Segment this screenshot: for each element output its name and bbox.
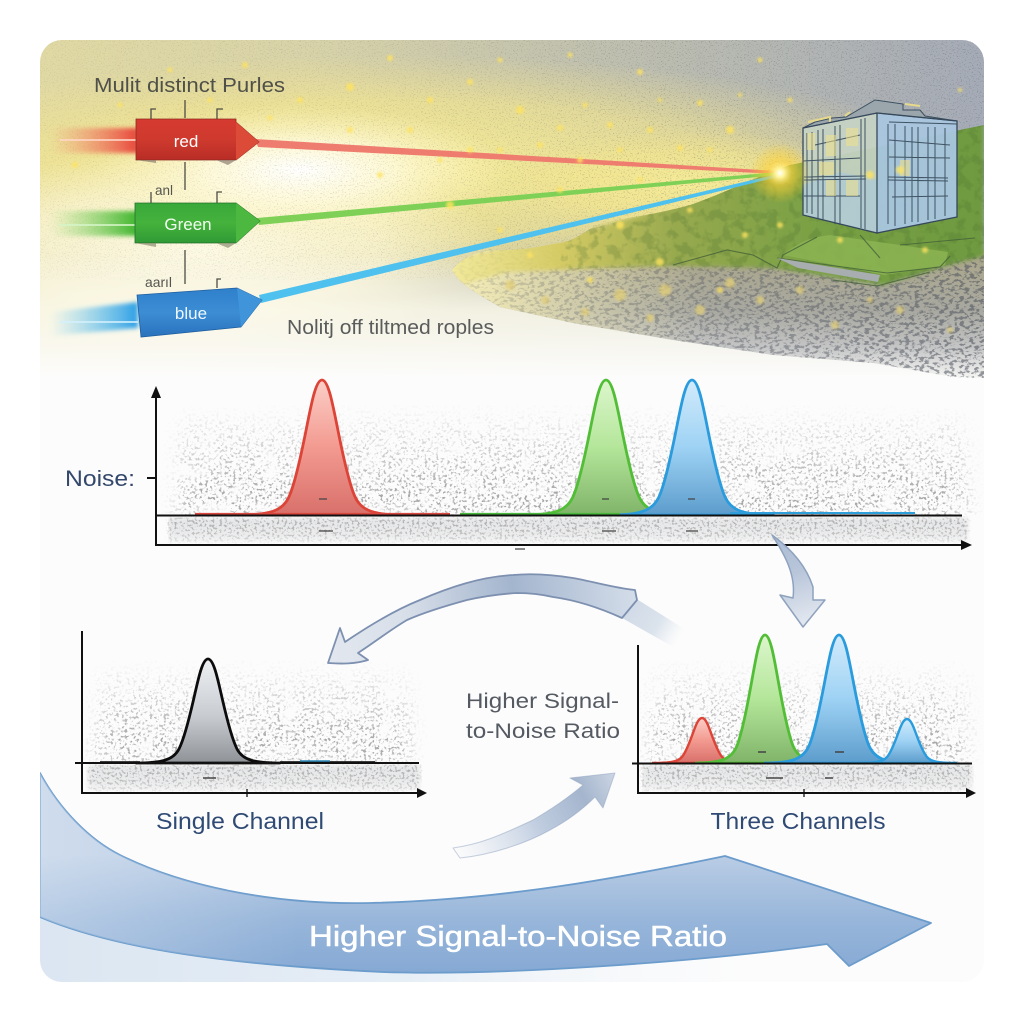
peak: tall blue [764, 635, 914, 763]
connectors [151, 100, 223, 288]
caption: noise ripples: Nolitj off tiltmed roples [287, 317, 494, 339]
arrow: down to three channels [772, 535, 825, 627]
panel: light beams hitting a building [0, 40, 984, 385]
yellow blotches on gravel [505, 278, 953, 333]
light focus point [752, 145, 808, 201]
axes [75, 631, 420, 797]
arrow: green pulse: Green [164, 215, 212, 234]
beam: blue [259, 174, 778, 303]
landscape: mottled vegetation [560, 120, 984, 290]
callout: higher signal-to-noise ratio [466, 692, 619, 738]
peak: blue [610, 380, 774, 515]
landscape [445, 120, 984, 380]
callout: higher signal-to-noise ratio: to-Noise Ratio [466, 720, 620, 743]
label: noise: Noise: [65, 466, 135, 491]
peak: black [136, 659, 280, 763]
landscape: lighter field patches [783, 235, 948, 275]
arrow: single channel up to three channels [453, 773, 615, 858]
sparkle dots [72, 52, 962, 293]
noise field [167, 415, 978, 515]
arrow: red pulse [50, 119, 259, 165]
axes [632, 645, 972, 797]
landscape: road [777, 258, 880, 282]
icon: building [803, 100, 957, 233]
landscape: gravel foreground [452, 250, 984, 380]
connector label: and: aarıl [145, 274, 172, 290]
arrow: red pulse: red [174, 132, 198, 151]
label: three channels: Three Channels [710, 808, 886, 834]
heading: distinct pulses: Mulit distinct Purles [94, 75, 285, 97]
arrow: blue pulse [50, 288, 262, 337]
callout: higher signal-to-noise ratio: Higher Signal- [466, 690, 619, 713]
peak: small blue [857, 719, 957, 763]
arrow: green pulse [50, 203, 260, 248]
peak: green [540, 378, 649, 514]
panel: noise chart with three channels [65, 380, 990, 550]
beam: red [255, 139, 778, 174]
peak: red [256, 378, 388, 513]
peak: tall green [695, 635, 835, 763]
arrow: three channels back to single channel [328, 574, 686, 664]
landscape: green ground [445, 120, 984, 285]
beam: green [257, 172, 778, 225]
chart: single channel [70, 631, 440, 834]
axes [147, 392, 966, 549]
landscape: dark path outlines [673, 235, 975, 286]
label: single channel: Single Channel [156, 808, 324, 834]
big arrow: higher signal-to-noise ratio [40, 773, 931, 982]
chart: three channels [632, 635, 992, 834]
connector label: and: anl [155, 182, 173, 198]
peak: small red [652, 718, 752, 763]
bottom fade [40, 255, 984, 385]
big arrow label: Higher Signal-to-Noise Ratio [309, 921, 727, 953]
arrow: blue pulse: blue [175, 304, 207, 323]
